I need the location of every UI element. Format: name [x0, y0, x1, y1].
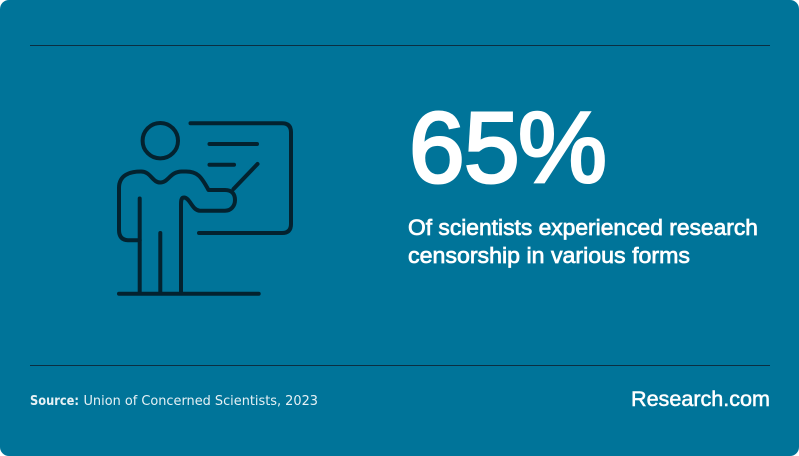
description text: censorship in various forms: [408, 243, 690, 268]
source note: Union of Concerned Scientists, 2023: [84, 394, 318, 409]
description text: Of scientists experienced research: [408, 215, 758, 240]
icon: teacher pointing at a board: [119, 123, 291, 294]
logo: Research.com: Research.com: [631, 388, 770, 411]
description text: [408, 215, 758, 268]
big stat: 65%: [409, 92, 607, 204]
source note: Source:: [30, 394, 79, 409]
